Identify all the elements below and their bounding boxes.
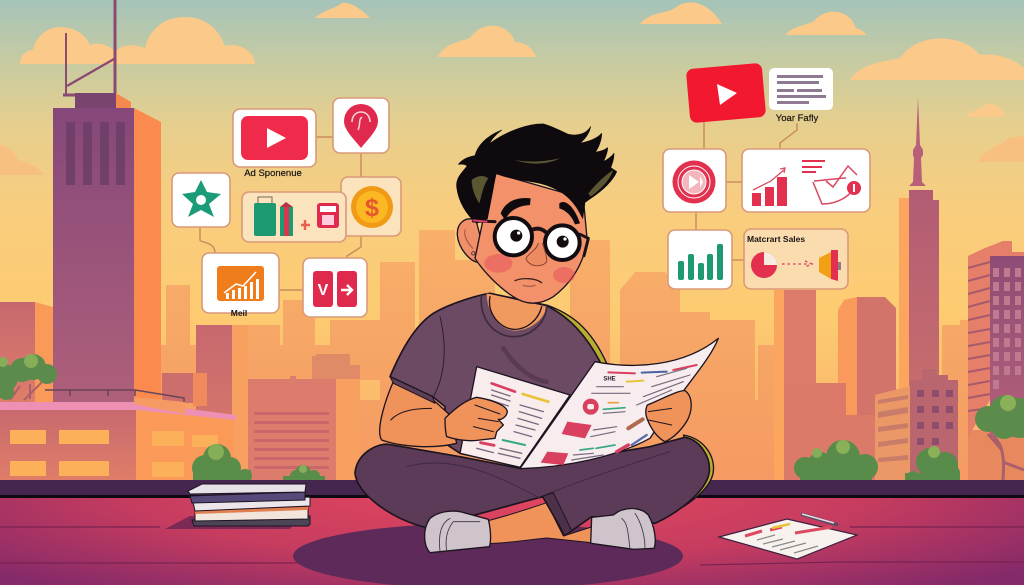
tower antenna [63, 0, 115, 95]
card: star [172, 173, 230, 227]
ground ledge [0, 480, 1024, 495]
card: bars and piggy [742, 149, 870, 212]
side building [0, 302, 53, 402]
right block [785, 383, 875, 480]
shirt [390, 293, 600, 467]
far skyline [160, 230, 968, 480]
left tree [0, 354, 57, 400]
ankle skin [488, 503, 593, 543]
bush [192, 444, 252, 483]
mid buildings left [162, 325, 360, 485]
card: gifts and calculator [242, 192, 346, 242]
back arm and torso [390, 293, 607, 467]
dotted window block [248, 376, 336, 480]
card: red play button [686, 63, 766, 123]
character [355, 124, 718, 553]
card: coin: $ [365, 194, 379, 222]
card: growth chart [202, 253, 279, 313]
card: circular play [663, 149, 726, 212]
trouser cuff [543, 493, 572, 535]
right icon cards [663, 63, 870, 289]
label: ad sponenue: Ad Sponenue [244, 168, 302, 179]
nose [526, 243, 547, 266]
shirt shoulder stripe [547, 305, 607, 370]
mouth [515, 279, 542, 286]
face [475, 173, 587, 303]
roof strip [0, 402, 236, 420]
bush [905, 446, 960, 483]
left low building [0, 390, 236, 480]
floor [0, 498, 1024, 585]
left icon cards [172, 98, 401, 318]
right page [520, 338, 718, 469]
right tree [975, 395, 1024, 480]
stepped block [838, 297, 896, 480]
sleeve hem [390, 377, 435, 403]
card: metcart sales: Matcrart Sales [747, 234, 805, 244]
left page [460, 367, 570, 467]
roof railing [45, 390, 184, 402]
trousers [355, 437, 709, 535]
bush [794, 440, 878, 480]
hazy clouds [0, 136, 1024, 175]
right hand [646, 391, 691, 442]
bush [283, 465, 325, 482]
card: location pin [333, 98, 389, 153]
glasses [473, 218, 588, 260]
newspaper [460, 338, 718, 469]
hair [457, 124, 617, 223]
card: youtube [233, 109, 316, 167]
trees and bushes [0, 354, 1024, 483]
right shoe [591, 508, 655, 549]
card: text lines [769, 68, 833, 110]
hair highlights [472, 158, 613, 203]
label: yoar fafly: Yoar Fafly [776, 113, 818, 124]
connector lines left [200, 137, 361, 290]
stack of books [165, 484, 310, 529]
label: meil: Meil [231, 308, 247, 318]
right buildings [774, 97, 1024, 480]
paper on floor [719, 514, 857, 559]
crossed legs [355, 435, 713, 543]
card: metcart sales [744, 229, 848, 289]
right purple tower [968, 241, 1024, 480]
eyebrows [501, 198, 580, 224]
left tower [0, 0, 161, 408]
connector lines right [696, 120, 797, 260]
spire tower [899, 97, 939, 480]
mid right block [875, 369, 958, 480]
cheek blush [484, 254, 575, 283]
card: green bars [668, 230, 732, 289]
ear [457, 219, 485, 262]
column [774, 290, 816, 480]
left arm [380, 382, 457, 447]
neck and collar [481, 293, 547, 337]
left shoe [425, 511, 491, 553]
floor shadow [293, 523, 683, 585]
pen [801, 514, 838, 525]
head [457, 124, 617, 303]
leg highlight [683, 435, 713, 507]
newspaper: SHE [603, 377, 616, 383]
left hand [445, 397, 507, 441]
clouds [20, 2, 1024, 117]
card: v arrow: V [318, 282, 329, 299]
card: coin [341, 177, 401, 236]
card: v arrow [303, 258, 367, 317]
